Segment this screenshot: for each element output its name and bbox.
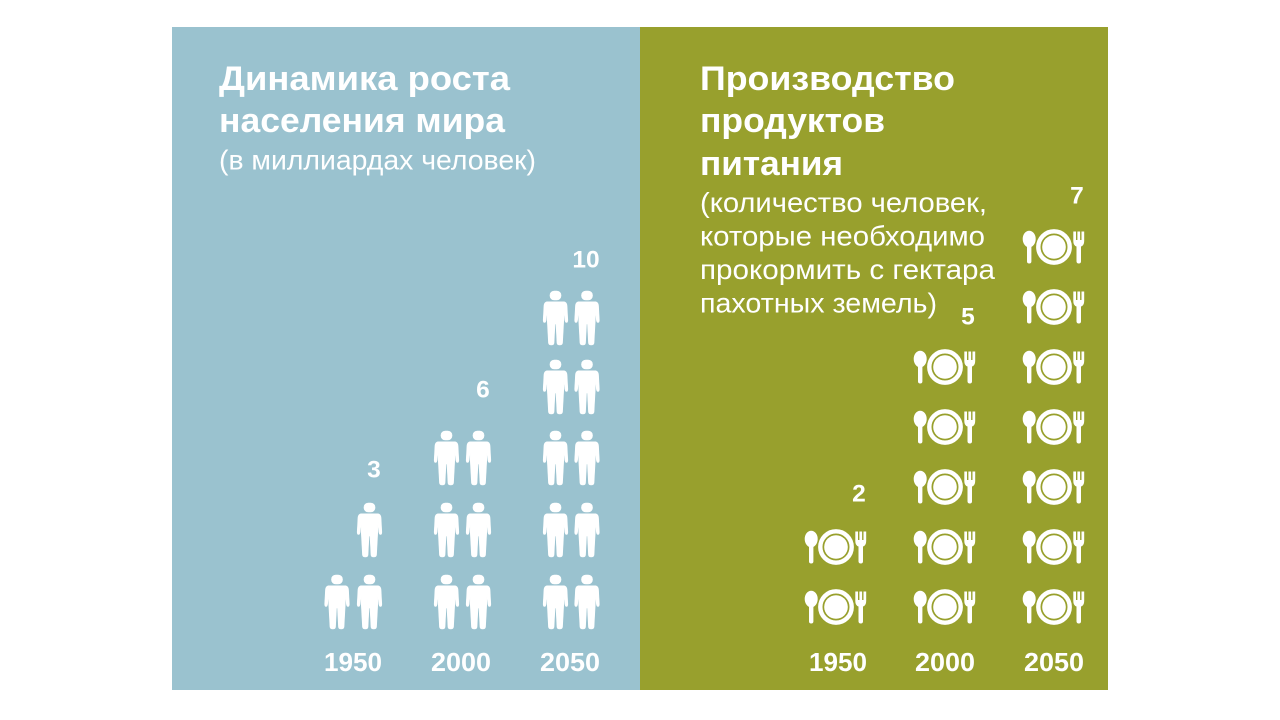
column: 2050 population: [540, 246, 600, 677]
food heading: питания: [700, 145, 843, 183]
column: 2000 food: [914, 304, 975, 677]
column: 1950 food: 2: [852, 480, 866, 508]
population heading: [219, 60, 536, 176]
column: 2050 population: 2050: [540, 647, 600, 677]
column: 2000 food: 2000: [915, 647, 975, 677]
food heading: Производство: [700, 60, 955, 98]
population heading: (в миллиардах человек): [219, 144, 536, 176]
column: 1950 population: 3: [367, 456, 381, 484]
food heading: прокормить с гектара: [700, 254, 996, 285]
food heading: [700, 60, 996, 318]
food heading: которые необходимо: [700, 220, 985, 252]
column: 1950 population: [324, 456, 382, 677]
panel: population: [172, 27, 640, 690]
column: 2000 population: 2000: [431, 647, 491, 677]
column: 2050 population: 10: [572, 246, 600, 274]
column: 2050 food: 2050: [1024, 647, 1084, 677]
column: 1950 population: 1950: [324, 647, 382, 677]
column: 2050 food: [1023, 182, 1084, 677]
column: 2000 food: 5: [961, 304, 975, 330]
column: 1950 food: 1950: [809, 647, 867, 677]
food heading: пахотных земель): [700, 288, 937, 318]
food heading: продуктов: [700, 102, 885, 140]
column: 2000 population: [431, 376, 491, 677]
population heading: Динамика роста: [219, 60, 511, 98]
column: 1950 food: [805, 480, 867, 677]
food heading: (количество человек,: [700, 187, 987, 218]
panel: food production: [640, 27, 1108, 690]
column: 2050 food: 7: [1070, 182, 1084, 210]
column: 2000 population: 6: [476, 376, 490, 404]
population heading: населения мира: [219, 102, 506, 140]
